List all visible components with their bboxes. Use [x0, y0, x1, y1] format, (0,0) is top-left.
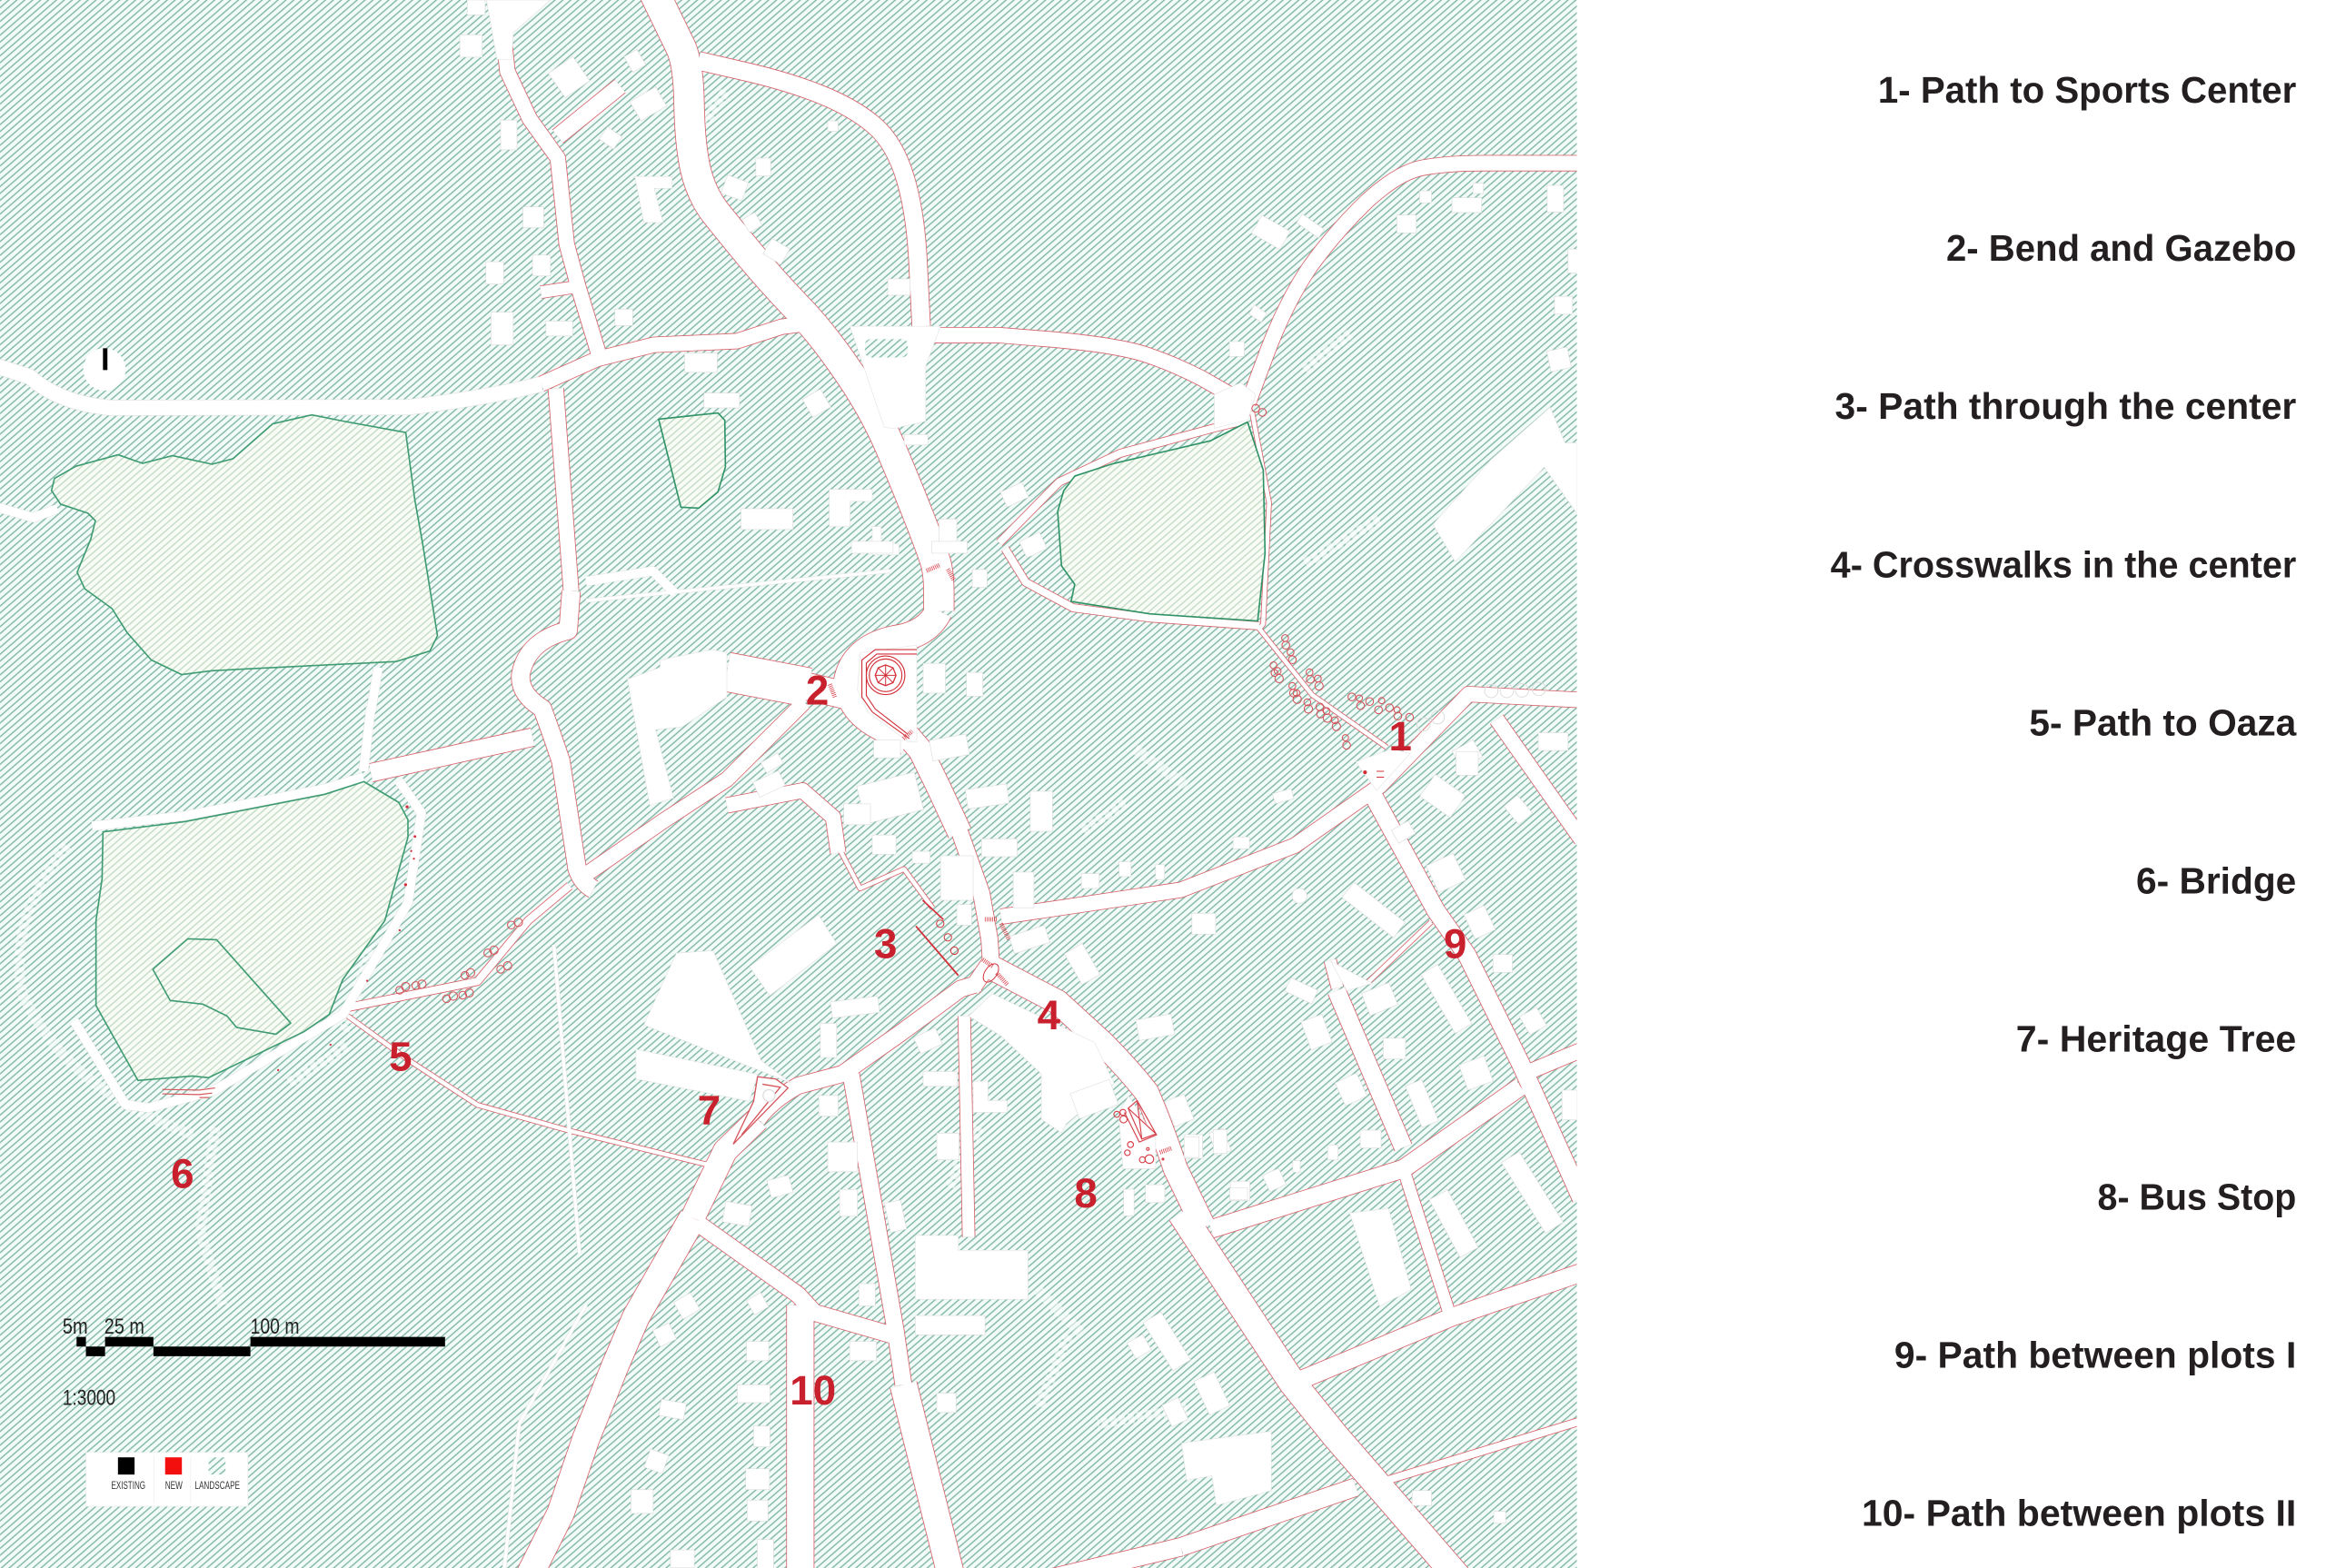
park: small central plot — [659, 413, 725, 508]
legend — [86, 1453, 248, 1506]
item 3: path and tree line — [916, 900, 1002, 985]
map number 5: 5 — [389, 1034, 413, 1080]
park: southwest field — [96, 781, 408, 1080]
map number 4: 4 — [1038, 992, 1061, 1038]
plaza island — [865, 339, 908, 357]
list item 1: 1- Path to Sports Center — [1878, 69, 2296, 111]
map number 2: 2 — [806, 667, 829, 713]
landscape hatch — [0, 0, 1576, 1568]
scale bar: 25 m — [104, 1315, 144, 1339]
list item 6: 6- Bridge — [2136, 859, 2296, 901]
list item 4: 4- Crosswalks in the center — [1831, 543, 2296, 585]
north marker — [84, 348, 125, 391]
park: northeast field — [1058, 422, 1265, 621]
marker 1 details — [1363, 770, 1384, 777]
legend: LANDSCAPE — [194, 1479, 240, 1492]
map number 6: 6 — [171, 1151, 194, 1197]
map scale: 1:3000 — [63, 1387, 115, 1411]
new trees — [396, 404, 1414, 1003]
map number 1: 1 — [1389, 713, 1412, 759]
scale bar: 5m — [63, 1315, 88, 1339]
item 7: heritage tree plot — [733, 1077, 788, 1144]
scale bar — [63, 1315, 445, 1356]
legend: NEW — [165, 1479, 183, 1492]
list item 7: 7- Heritage Tree — [2016, 1017, 2296, 1059]
existing trees — [1416, 682, 1546, 731]
panel: list of interventions — [1831, 69, 2297, 1533]
buildings — [460, 0, 1580, 1568]
list item 8: 8- Bus Stop — [2098, 1176, 2296, 1217]
item 6: bridge — [163, 1088, 215, 1097]
map number 7: 7 — [698, 1087, 721, 1134]
item 8: bus stop — [1114, 1101, 1164, 1164]
map number 10: 10 — [790, 1367, 836, 1414]
road network — [0, 0, 1581, 1568]
legend: EXISTING — [111, 1479, 145, 1492]
list item 2: 2- Bend and Gazebo — [1946, 227, 2296, 269]
new lighting points along park path — [277, 806, 416, 1071]
park: inner pond outline — [153, 938, 291, 1034]
crosswalks — [830, 565, 1172, 1153]
faint tree scribbles — [19, 89, 1379, 1424]
map number 9: 9 — [1444, 921, 1466, 968]
map number 3: 3 — [874, 921, 897, 968]
icon: gazebo — [862, 650, 917, 739]
plazas and open lots — [487, 0, 1576, 1505]
map number 8: 8 — [1074, 1170, 1098, 1216]
park: northwest meadow — [52, 415, 437, 675]
scale bar: 100 m — [251, 1315, 299, 1339]
list item 10: 10- Path between plots II — [1862, 1492, 2296, 1533]
list item 9: 9- Path between plots I — [1894, 1334, 2296, 1375]
panel: site map — [0, 0, 1581, 1568]
list item 5: 5- Path to Oaza — [2029, 701, 2297, 743]
list item 3: 3- Path through the center — [1835, 385, 2296, 427]
